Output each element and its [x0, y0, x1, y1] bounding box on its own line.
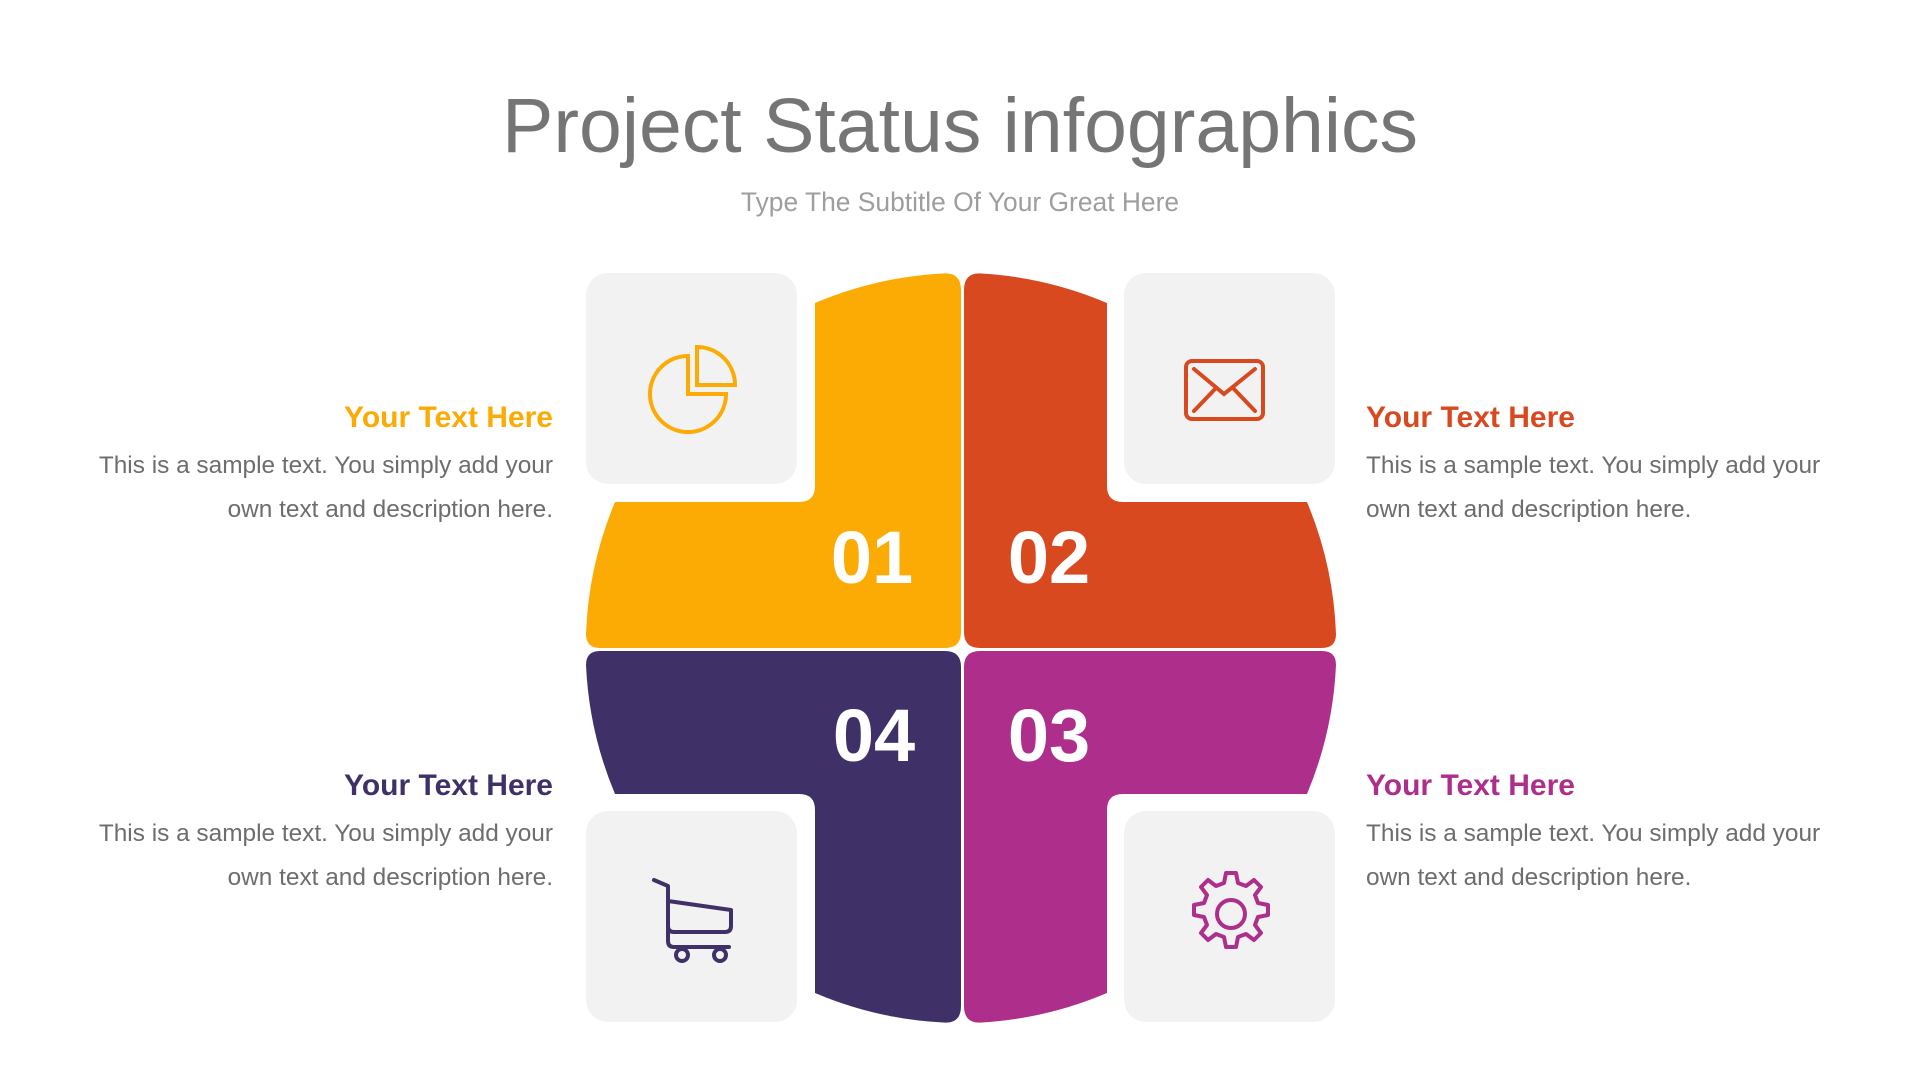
number 02: 02: [1008, 516, 1090, 599]
text block 01: Your Text Here: [344, 401, 553, 434]
text block 01: own text and description here.: [228, 496, 553, 523]
icon box 03: [1124, 811, 1335, 1022]
quadrant 04: [586, 651, 961, 1023]
quadrant 01: [586, 273, 961, 648]
text block 04: This is a sample text. You simply add your: [99, 820, 553, 847]
text block 04: own text and description here.: [228, 864, 553, 891]
text block 03: own text and description here.: [1366, 864, 1691, 891]
icon box 02: [1124, 273, 1335, 484]
number 03: 03: [1008, 694, 1090, 777]
text block 01: [99, 401, 553, 523]
icon box 01: [586, 273, 797, 484]
text block 02: Your Text Here: [1366, 401, 1575, 434]
icon box 04: [586, 811, 797, 1022]
text block 03: This is a sample text. You simply add your: [1366, 820, 1820, 847]
text block 04: Your Text Here: [344, 769, 553, 802]
text block 02: [1366, 401, 1820, 523]
icon: shopping cart: [654, 880, 731, 961]
subtitle: Type The Subtitle Of Your Great Here: [741, 187, 1179, 217]
icon: envelope: [1186, 361, 1263, 419]
text block 03: Your Text Here: [1366, 769, 1575, 802]
text block 02: own text and description here.: [1366, 496, 1691, 523]
text block 04: [99, 769, 553, 891]
number 01: 01: [831, 516, 913, 599]
title: Project Status infographics: [502, 83, 1418, 169]
text block 01: This is a sample text. You simply add your: [99, 452, 553, 479]
icon: gear: [1194, 873, 1268, 947]
quadrant 02: [964, 273, 1336, 648]
quadrant 03: [964, 651, 1336, 1023]
text block 02: This is a sample text. You simply add your: [1366, 452, 1820, 479]
number 04: 04: [833, 694, 915, 777]
text block 03: [1366, 769, 1820, 891]
icon: pie chart: [650, 347, 735, 432]
